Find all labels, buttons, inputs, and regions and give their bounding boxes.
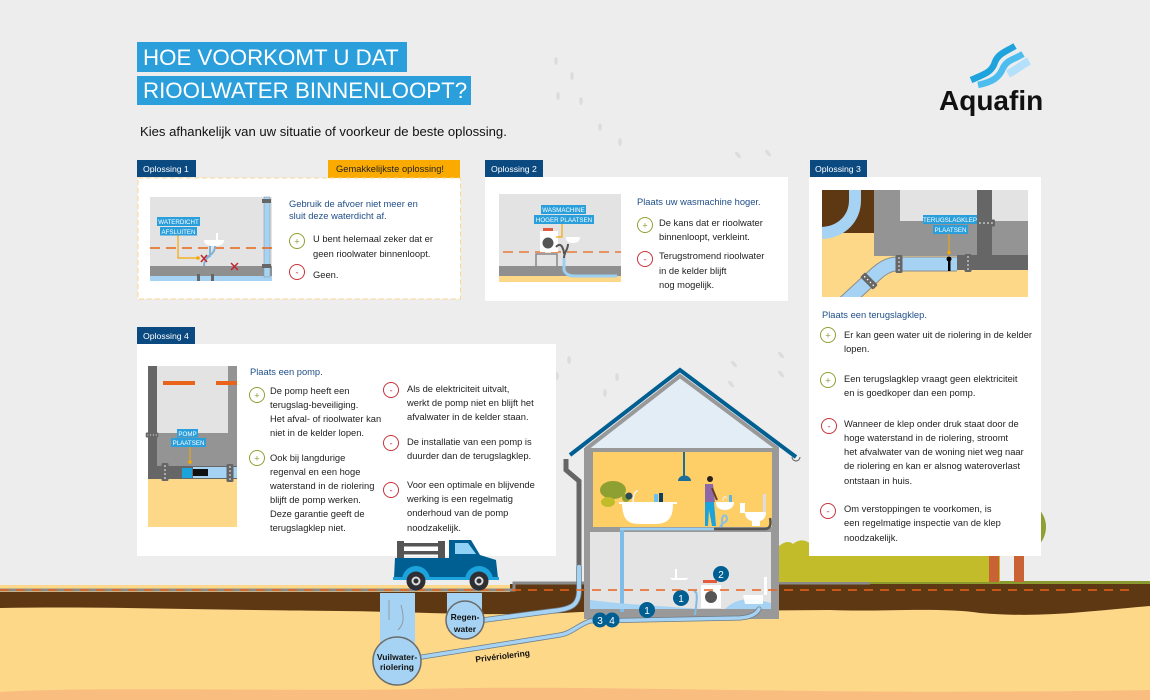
rain drops [554,57,785,397]
pro 2: terugslagklep niet. [270,523,346,533]
gutter and downspout [566,459,579,567]
card [809,177,1041,556]
con 2: duurder dan de terugslagklep. [407,451,531,461]
pro: De kans dat er rioolwater [659,218,763,228]
washing machine [701,580,721,608]
illustration: backflow valve: PLAATSEN [935,227,966,234]
toilet [740,494,766,526]
illustration: seal drain [150,197,272,281]
con 2 [820,504,1001,543]
con 1 [384,382,534,422]
illustration: backflow valve [822,190,1028,307]
number badges: 3 [597,616,603,627]
title [137,42,471,105]
con 3: noodzakelijk. [407,523,461,533]
illustration: backflow valve: TERUGSLAGKLEP [923,217,977,224]
heading [289,199,418,221]
tab [810,160,867,177]
con: in de kelder blijft [659,266,727,276]
con 2: - [826,506,830,516]
load [397,541,445,559]
lamp [678,452,691,481]
vuilwater well: Vuilwater- [377,652,417,662]
pro 1: terugslag-beveiliging. [270,400,358,410]
con 1: - [827,422,831,432]
con 1 [822,418,1024,486]
pro 1: + [825,330,831,340]
pro 2: en is goedkoper dan een pomp. [844,388,975,398]
title: HOE VOORKOMT U DAT [143,45,399,70]
wheels [406,572,488,590]
con: Geen. [313,270,338,280]
con 3: onderhoud van de pomp [407,508,508,518]
road surface [0,583,870,590]
heading: Gebruik de afvoer niet meer en [289,199,418,209]
con: - [295,268,299,278]
pro 2: + [825,376,831,386]
card [485,177,788,301]
illustration: raised washing machine: HOGER PLAATSEN [536,217,592,224]
con 3: - [389,486,393,496]
pro 2: blijft de pomp werken. [270,495,361,505]
pro: geen rioolwater binnenloopt. [313,249,430,259]
con 1: afvalwater in de kelder staan. [407,412,529,422]
pro: + [642,220,648,230]
label: Privériolering: Privériolering [475,648,530,664]
soil: sand [0,585,1150,700]
Aquafin logo: Aquafin [939,85,1043,116]
con: Terugstromend rioolwater [659,251,764,261]
con 1: Als de elektriciteit uitvalt, [407,384,509,394]
illustration: seal drain: WATERDICHT [158,219,199,226]
con 2: een regelmatige inspectie van de klep [844,518,1001,528]
card [137,344,556,556]
regenwater well: water [453,624,477,634]
con 1: werkt de pomp niet en blijft het [406,398,534,408]
soil: deep orange layer [0,688,1150,700]
lower floor [584,527,779,619]
illustration: seal drain: AFSLUITEN [161,229,196,236]
con 1: de riolering en kan er alsnog wateroverlast [844,461,1020,471]
pro: binnenloopt, verkleint. [659,232,750,242]
con [638,251,764,290]
tab [485,160,543,177]
tab: Oplossing 1 [143,164,189,174]
con 2: - [389,438,393,448]
bath [619,491,677,524]
con 2: De installatie van een pomp is [407,437,532,447]
upper floor [584,448,779,532]
easiest solution tag: Gemakkelijkste oplossing! [336,164,444,174]
sink [716,495,734,527]
pro [638,218,763,242]
heading: Plaats een pomp. [250,367,323,377]
con: - [643,254,647,264]
tab: Oplossing 2 [491,164,537,174]
heading: sluit deze waterdicht af. [289,211,387,221]
pro 1: De pomp heeft een [270,386,349,396]
pro 2: regenval en een hoge [270,467,360,477]
illustration: pump: PLAATSEN [173,440,204,447]
Aquafin logo [939,46,1043,116]
easiest solution tag [328,160,460,178]
illustration: pump: POMP [178,431,197,438]
number badges: 1 [678,594,684,605]
basement water [590,599,771,609]
pro 1: Er kan geen water uit de riolering in de kelder [844,330,1032,340]
illustration: raised washing machine [499,194,621,282]
pro 2: Deze garantie geeft de [270,509,365,519]
con 1: - [389,386,393,396]
panel: oplossing 1 [137,160,460,299]
heading: Plaats een terugslagklep. [822,310,927,320]
pro 1: Het afval- of rioolwater kan [270,414,381,424]
number badges: 1 [644,606,650,617]
pro: U bent helemaal zeker dat er [313,234,433,244]
icon: waves [971,46,1029,85]
con 1: het afvalwater van de woning niet weg naar [844,447,1024,457]
soil: brown layer [0,584,1150,615]
regenwater well [446,593,484,639]
number badges: 4 [609,616,615,627]
con 2: Om verstoppingen te voorkomen, is [844,504,992,514]
ground scene [0,501,1150,700]
con 1: Wanneer de klep onder druk staat door de [844,419,1019,429]
pro 2: waterstand in de riolering [269,481,374,491]
dashed flood line [0,589,1130,591]
truck [393,540,499,590]
con 2: noodzakelijk. [844,533,898,543]
panel: oplossing 4 [137,327,556,556]
sewer pipes [422,567,759,657]
tab: Oplossing 4 [143,331,189,341]
tree [989,501,1046,582]
tab: Oplossing 3 [815,164,861,174]
pro 1: niet in de kelder lopen. [270,428,364,438]
bush [779,540,1000,582]
pro 2: + [254,454,260,464]
con 1: ontstaan in huis. [844,476,912,486]
pro 1: + [254,390,260,400]
pro 1 [250,386,381,438]
drain [694,592,697,615]
basement sink [670,569,689,580]
panel: oplossing 3 [809,160,1041,556]
con 2 [384,436,532,461]
subtitle: Kies afhankelijk van uw situatie of voorkeur de beste oplossing. [140,124,507,139]
card [138,178,460,299]
pipes lower floor [590,530,771,615]
tab [137,327,195,344]
attic [586,375,778,449]
tab [137,160,196,177]
pro [290,234,433,259]
pro 1 [820,328,1032,354]
title: RIOOLWATER BINNENLOOPT? [143,78,467,103]
panel: oplossing 2 [485,160,788,301]
basement toilet [743,577,767,604]
grass [870,581,1150,584]
pro: + [294,236,300,246]
number badges: 2 [718,570,724,581]
pro 2 [820,372,1018,398]
person washing [705,476,717,526]
con 3 [384,480,535,533]
regenwater well: Regen- [451,612,480,622]
vuilwater well [373,593,421,685]
vuilwater well: riolering [380,662,414,672]
con [290,264,338,280]
heading: Plaats uw wasmachine hoger. [637,197,761,207]
pro 2: Een terugslagklep vraagt geen elektriciteit [844,374,1018,384]
con 3: werking is een regelmatig [406,494,513,504]
illustration: pump [146,366,237,527]
number badges [592,566,729,628]
con: nog mogelijk. [659,280,714,290]
house [566,370,800,619]
roof [586,376,778,449]
pro 2 [250,450,374,533]
con 3: Voor een optimale en blijvende [407,480,535,490]
plant [600,481,630,507]
con 1: hoge waterstand in de riolering, stroomt [844,433,1009,443]
pro 2: Ook bij langdurige [270,453,345,463]
illustration: raised washing machine: WASMACHINE [542,207,585,214]
pro 1: lopen. [844,344,869,354]
drain pipes upper floor [620,528,714,530]
body [394,540,498,578]
